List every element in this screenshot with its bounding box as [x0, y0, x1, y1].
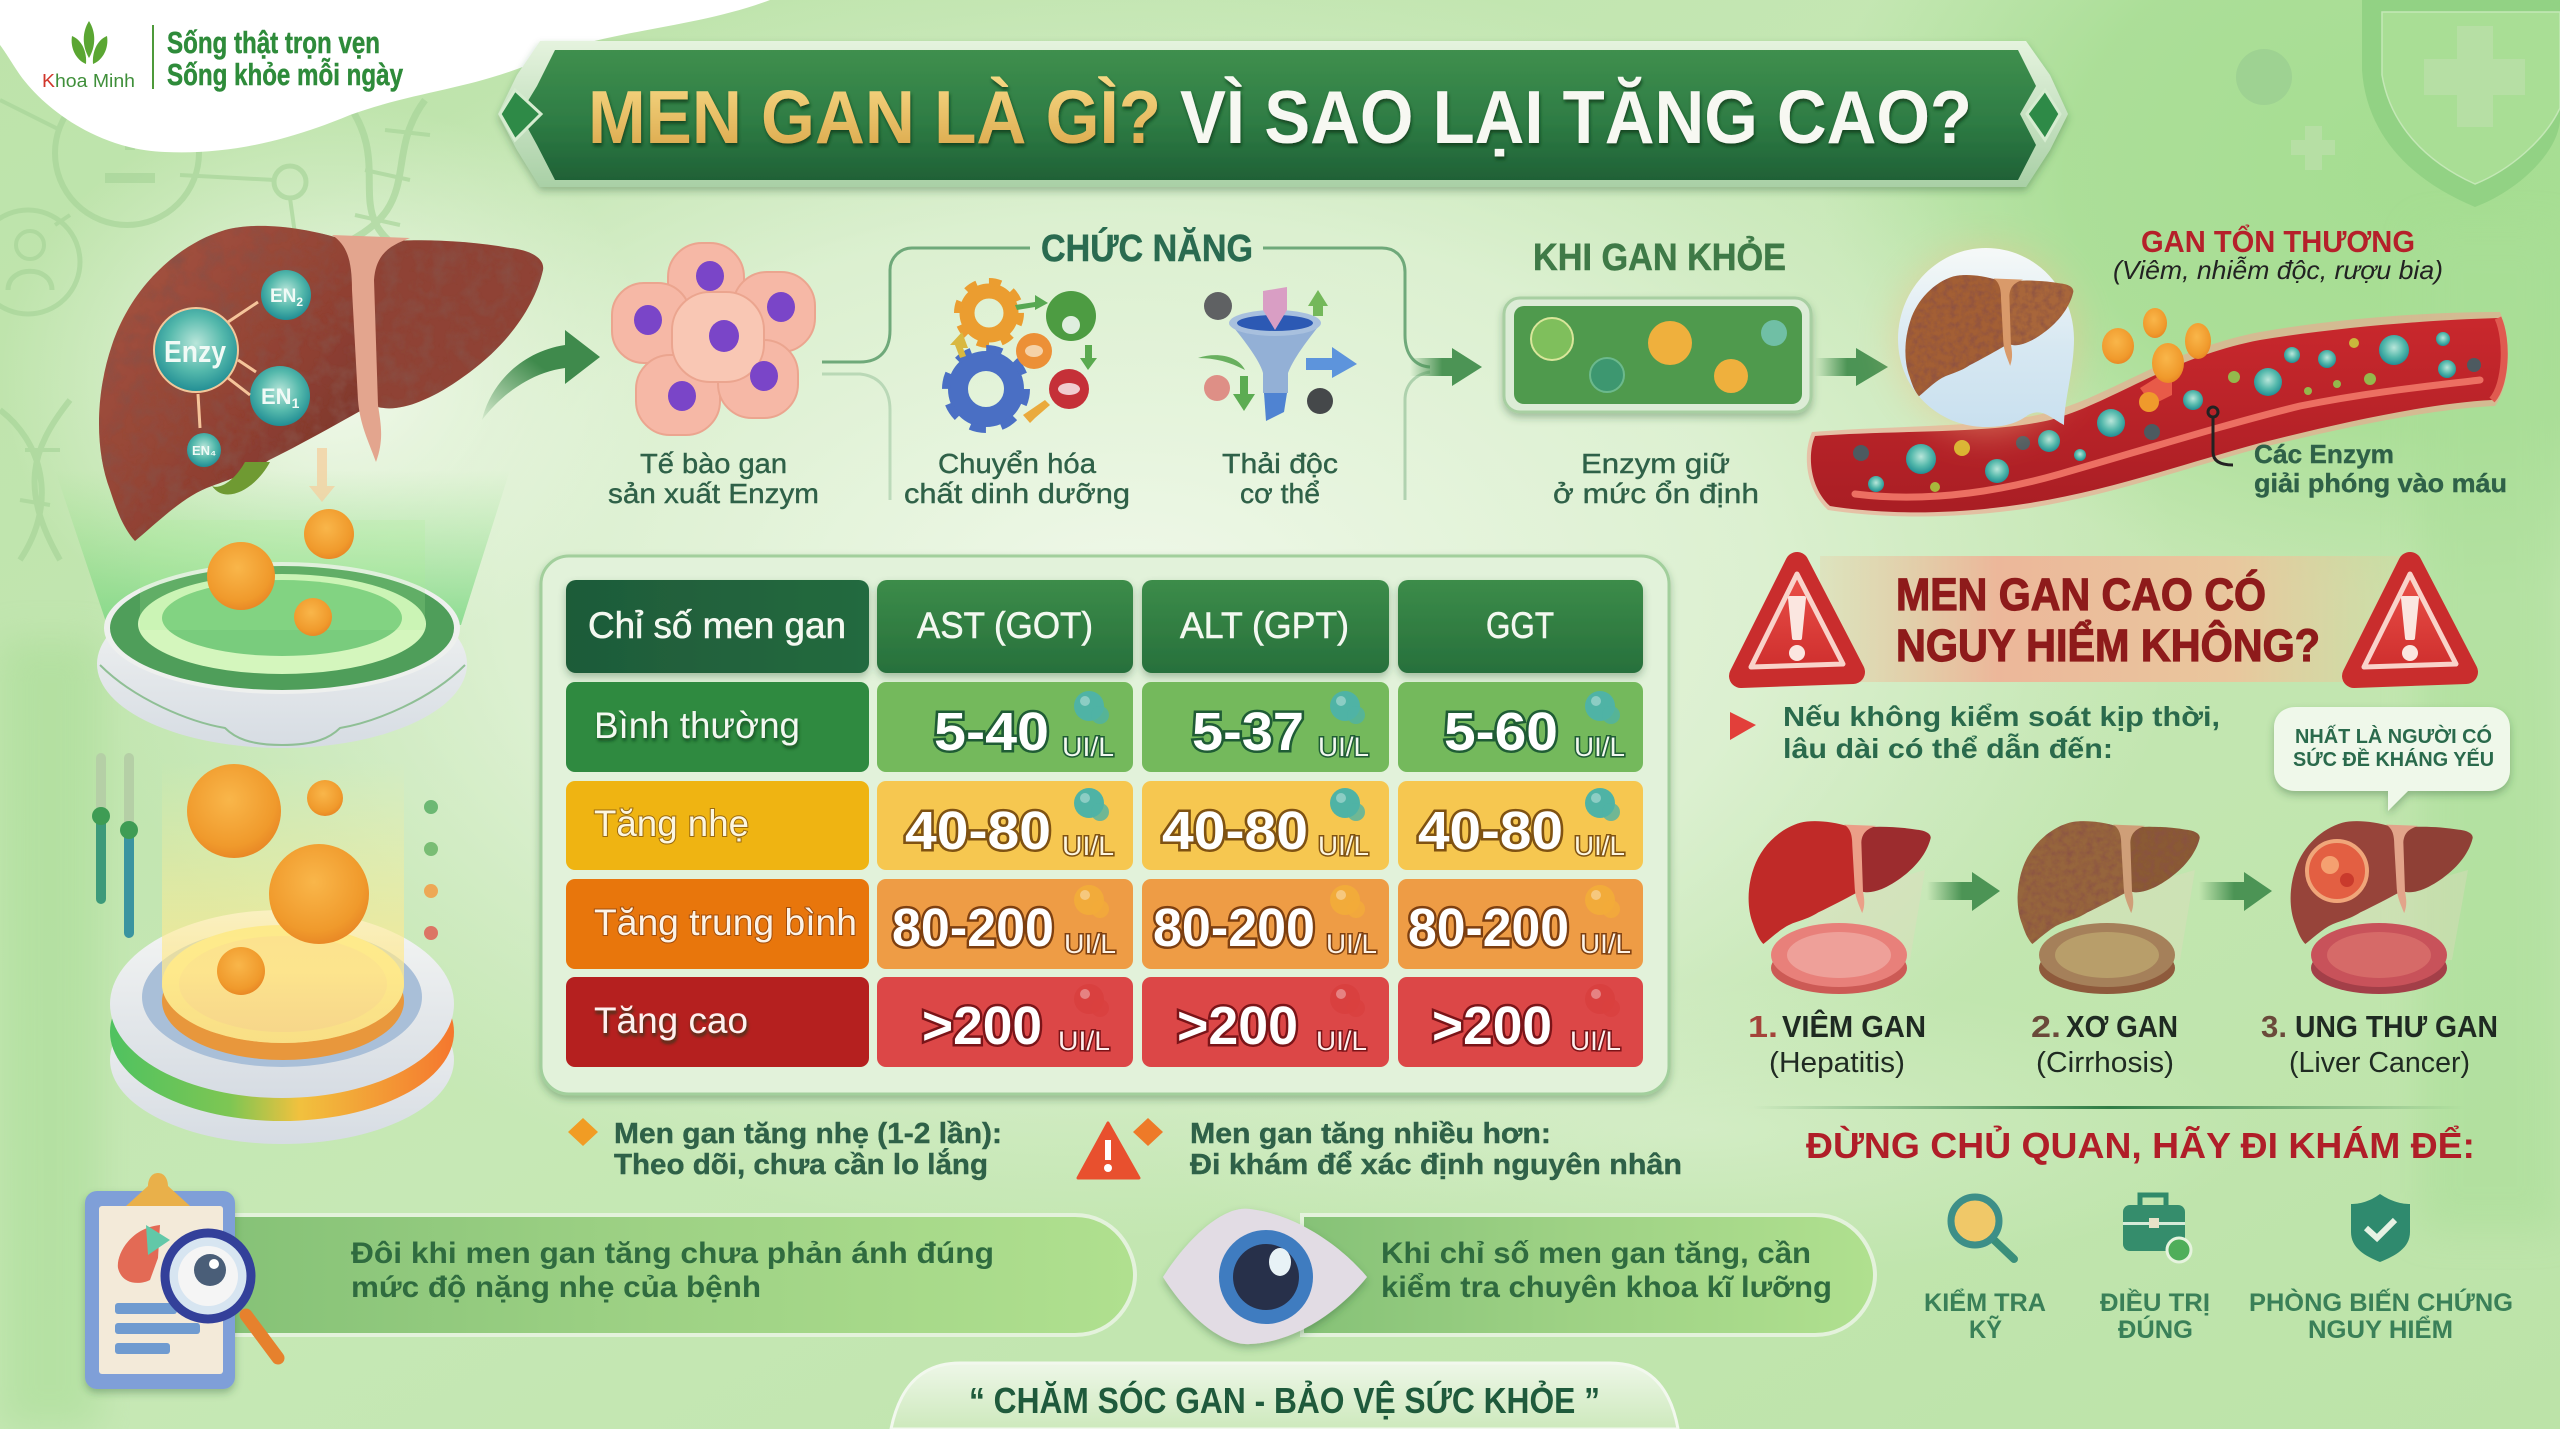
upper enzyme orbs [207, 509, 354, 636]
arrow: cirrhosis to cancer [2199, 872, 2272, 911]
text: detox: cơ thể [1240, 478, 1320, 509]
stage 3: liver cancer [2261, 821, 2498, 1079]
row: moderate increase: 80-200 [1153, 898, 1315, 958]
arrow: functions to healthy liver [1410, 348, 1482, 386]
callout: weak resistance: SỨC ĐỀ KHÁNG YẾU [2293, 747, 2494, 771]
row: high increase: UI/L [1570, 1026, 1621, 1056]
stage 3: liver cancer: UNG THƯ GAN [2295, 1009, 2498, 1044]
text: detox: Thải độc [1222, 448, 1338, 479]
enzyme EN4 [187, 433, 221, 467]
text: liver cells: Tế bào gan [640, 448, 787, 479]
enzyme EN2 [261, 270, 311, 320]
text: liver cells: sản xuất Enzym [608, 478, 819, 509]
enzyme EN1 [250, 366, 310, 426]
callout: weak resistance [2274, 707, 2510, 811]
arrow: liver to cells [482, 330, 600, 420]
warning heading line 1: MEN GAN CAO CÓ [1896, 569, 2266, 620]
intro text with marker: Nếu không kiểm soát kịp thời, [1783, 701, 2220, 732]
brand logo block [0, 0, 770, 152]
row: high increase: >200 [922, 996, 1042, 1056]
row: high increase [566, 977, 1643, 1067]
note: strong increase: Đi khám để xác định nguyên nhân [1190, 1149, 1682, 1181]
bottom tagline tab: “ CHĂM SÓC GAN - BẢO VỆ SỨC KHỎE ” [969, 1379, 1600, 1421]
enzyme EN2: 2 [296, 295, 303, 309]
title part 2 white: VÌ SAO LẠI TĂNG CAO? [1180, 75, 1972, 159]
stage 1: hepatitis: 1. [1748, 1009, 1778, 1044]
row: high increase: >200 [1432, 996, 1552, 1056]
stage 2: cirrhosis [2018, 821, 2200, 1079]
stage 3: liver cancer: 3. [2261, 1009, 2287, 1044]
row: high increase: Tăng cao [594, 1000, 748, 1041]
note: mild increase: Men gan tăng nhẹ (1-2 lần): [614, 1118, 1002, 1150]
sliders icon [92, 753, 138, 938]
heading: khi gan khỏe: KHI GAN KHỎE [1533, 235, 1786, 279]
icon: eye [1163, 1209, 1367, 1344]
icon: green leaf logo [72, 21, 107, 64]
action: treat correctly [2100, 1195, 2210, 1344]
icon: warning left [1741, 564, 1853, 676]
header row [566, 580, 1643, 673]
icon: detox funnel [1198, 287, 1357, 421]
text: enzymes released: Các Enzym [2254, 439, 2394, 469]
row: normal [566, 682, 1643, 772]
row: normal: 5-60 [1444, 702, 1558, 762]
stage 2: cirrhosis: 2. [2031, 1009, 2061, 1044]
text: enzymes released [2254, 439, 2507, 498]
title banner [498, 41, 2068, 187]
slogan line 2: Sống khỏe mỗi ngày [167, 57, 404, 92]
header row: ALT (GPT) [1180, 605, 1349, 646]
note: mild increase [568, 1118, 1002, 1181]
row: normal: 5-37 [1192, 702, 1304, 762]
row: high increase: >200 [1177, 996, 1298, 1056]
intro text with marker: lâu dài có thể dẫn đến: [1783, 733, 2113, 764]
header row: GGT [1486, 605, 1554, 646]
action: prevent complications: PHÒNG BIẾN CHỨNG [2249, 1287, 2513, 1317]
row: moderate increase: 80-200 [1408, 898, 1569, 958]
row: high increase: UI/L [1316, 1026, 1367, 1056]
speech bubble with damaged liver [1893, 246, 2079, 432]
row: normal: UI/L [1318, 732, 1369, 762]
heading: chức năng: CHỨC NĂNG [1041, 226, 1253, 270]
enzyme EN2: EN [270, 286, 296, 307]
row: moderate increase [566, 879, 1643, 969]
upper green podium with enzyme orbs [55, 470, 510, 748]
illustration: liver cells [612, 243, 815, 435]
row: mild increase: UI/L [1574, 831, 1625, 861]
stage 2: cirrhosis: (Cirrhosis) [2036, 1047, 2174, 1079]
function connector lines [822, 248, 1430, 500]
title part 1 gold: MEN GAN LÀ GÌ? [588, 75, 1161, 159]
enzyme orbs [187, 764, 369, 995]
status dots [424, 800, 438, 940]
action: treat correctly: ĐIỀU TRỊ [2100, 1288, 2210, 1317]
stage 3: liver cancer: (Liver Cancer) [2289, 1047, 2470, 1079]
illustration: blood vessel with enzymes [1807, 308, 2508, 516]
text: liver cells [608, 448, 819, 509]
row: mild increase [566, 781, 1643, 870]
enzyme EN1: EN [261, 384, 292, 409]
shield and crosses decoration top right [2236, 0, 2560, 207]
action: prevent complications [2249, 1194, 2513, 1344]
text: metabolism [904, 448, 1130, 509]
note: strong increase [1078, 1118, 1682, 1181]
note: mild increase: Theo dõi, chưa cần lo lắng [614, 1147, 988, 1181]
row: moderate increase: UI/L [1064, 929, 1116, 959]
action: check thoroughly: KIỂM TRA [1924, 1288, 2046, 1317]
pill: note one: mức độ nặng nhẹ của bệnh [351, 1271, 761, 1304]
heading: gan tổn thương: GAN TỔN THƯƠNG [2141, 223, 2415, 259]
action: check thoroughly [1924, 1197, 2046, 1344]
pill: note one [230, 1215, 1135, 1335]
note: strong increase: Men gan tăng nhiều hơn: [1190, 1118, 1551, 1150]
header row: AST (GOT) [917, 605, 1093, 646]
row: mild increase: 40-80 [1162, 801, 1308, 861]
pill: note two: Khi chỉ số men gan tăng, cần [1381, 1237, 1811, 1270]
row: moderate increase: UI/L [1326, 929, 1377, 959]
illustration: big liver with enzymes [99, 226, 543, 541]
row: normal: UI/L [1062, 732, 1114, 762]
row: moderate increase: 80-200 [892, 898, 1054, 958]
background decoration: DNA and medical circles [0, 81, 430, 560]
stage 1: hepatitis: (Hepatitis) [1769, 1047, 1905, 1079]
brand name: Khoa Minh [42, 71, 135, 91]
row: mild increase: Tăng nhẹ [594, 803, 749, 844]
text: detox [1222, 448, 1338, 509]
heading: see a doctor: ĐỪNG CHỦ QUAN, HÃY ĐI KHÁM ĐỂ: [1806, 1124, 2475, 1166]
enzyme EN4: EN₄ [192, 443, 216, 458]
text: enzymes released: giải phóng vào máu [2254, 468, 2507, 498]
warning banner [1741, 556, 2466, 682]
text: metabolism: Chuyển hóa [938, 448, 1096, 479]
panel: enzyme table [541, 556, 1669, 1094]
action: treat correctly: ĐÚNG [2118, 1314, 2193, 1344]
stable enzyme box [1504, 298, 1811, 412]
icon: warning right [2354, 564, 2466, 676]
row: mild increase: 40-80 [905, 801, 1051, 861]
intro text with marker [1730, 701, 2220, 764]
action: check thoroughly: KỸ [1969, 1314, 2002, 1344]
subheading: causes: (Viêm, nhiễm độc, rượu bia) [2113, 255, 2443, 285]
callout: weak resistance: NHẤT LÀ NGƯỜI CÓ [2295, 724, 2492, 748]
row: normal: 5-40 [934, 702, 1049, 762]
stage 1: hepatitis: VIÊM GAN [1782, 1008, 1926, 1044]
warning heading line 2: NGUY HIỂM KHÔNG? [1896, 620, 2320, 671]
enzyme Enzy: Enzy [164, 334, 227, 369]
arrow: hepatitis to cirrhosis [1927, 872, 2000, 911]
lower orange podium with enzyme orbs [110, 761, 454, 1144]
header row: Chỉ số men gan [588, 605, 846, 646]
text: metabolism: chất dinh dưỡng [904, 478, 1130, 509]
row: moderate increase: Tăng trung bình [594, 902, 857, 943]
pill: note two: kiểm tra chuyên khoa kĩ lưỡng [1381, 1271, 1832, 1304]
falling enzyme arrow [309, 448, 335, 502]
row: normal: Bình thường [594, 705, 800, 746]
row: mild increase: UI/L [1318, 831, 1369, 861]
bottom tagline tab [891, 1363, 1678, 1429]
text: enzyme stable: Enzym giữ [1581, 448, 1730, 479]
stage 1: hepatitis [1748, 821, 1931, 1079]
escaping enzyme orbs [2102, 308, 2211, 383]
text: enzyme stable [1553, 448, 1759, 509]
icon: metabolism gears [946, 282, 1097, 429]
icon: clipboard with magnifier [85, 1173, 278, 1389]
enzyme particles [1853, 332, 2481, 492]
text: enzyme stable: ở mức ổn định [1553, 478, 1759, 509]
row: mild increase: 40-80 [1418, 801, 1563, 861]
row: moderate increase: UI/L [1580, 929, 1631, 959]
enzyme Enzy [154, 308, 238, 392]
row: high increase: UI/L [1058, 1026, 1110, 1056]
pointer line to vessel [2208, 407, 2233, 465]
arrow: box to damage [1815, 348, 1888, 386]
pill: note one: Đôi khi men gan tăng chưa phản ánh đúng [351, 1237, 994, 1270]
row: mild increase: UI/L [1062, 831, 1114, 861]
row: normal: UI/L [1574, 732, 1625, 762]
pill: note two [1302, 1215, 1875, 1335]
stage 2: cirrhosis: XƠ GAN [2066, 1009, 2178, 1044]
slogan line 1: Sống thật trọn vẹn [167, 25, 380, 60]
action: prevent complications: NGUY HIỂM [2308, 1315, 2453, 1344]
enzyme EN1: 1 [292, 395, 300, 411]
